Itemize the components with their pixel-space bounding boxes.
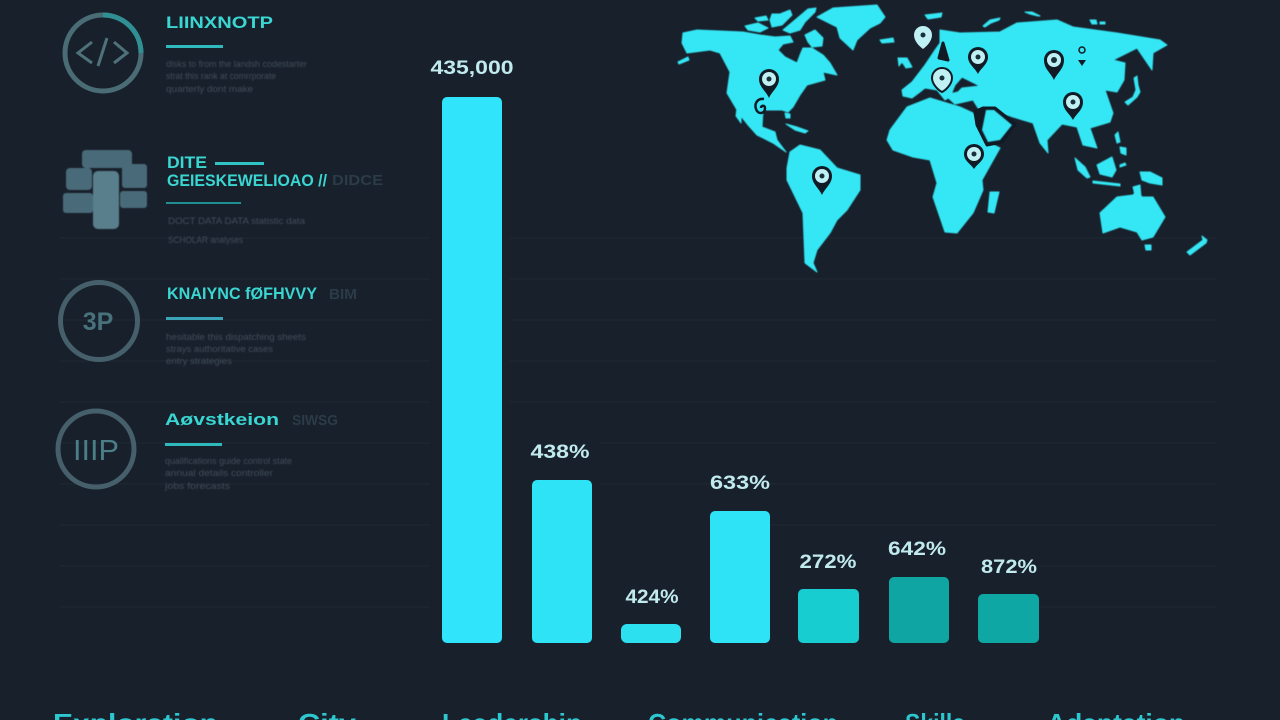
bar 3 bbox=[621, 587, 681, 643]
bar 6: 642% bbox=[888, 539, 946, 560]
bar chart bbox=[430, 58, 1039, 643]
icon: knot circle bbox=[60, 282, 138, 360]
bar 1: 435,000 bbox=[430, 58, 514, 79]
icon: monogram circle bbox=[58, 411, 134, 487]
map pin: spiral mexico bbox=[755, 99, 765, 113]
text block: item 2 bbox=[168, 216, 305, 245]
text block: item 1: quarterly dont make bbox=[166, 84, 253, 94]
item: data skill bbox=[63, 150, 383, 245]
heading: item 4: Aøvstkeion bbox=[165, 410, 279, 429]
icon: monogram circle: IIIP bbox=[73, 435, 119, 467]
text block: item 4 bbox=[164, 456, 292, 491]
item: strategy skill bbox=[60, 282, 357, 366]
map landmasses bbox=[678, 5, 1207, 272]
world map bbox=[678, 5, 1207, 272]
text block: item 4: qualifications guide control state bbox=[165, 456, 292, 466]
text block: item 4: annual details controller bbox=[165, 468, 273, 478]
map pin: scandinavia bbox=[914, 26, 932, 49]
icon: stacked blocks bbox=[63, 150, 147, 229]
text block: item 1 bbox=[166, 59, 307, 94]
text block: item 2: SCHOLAR analyses bbox=[168, 235, 243, 245]
text block: item 4: jobs forecasts bbox=[164, 481, 231, 491]
bar 2: 438% bbox=[530, 442, 590, 463]
text block: item 3: entry strategies bbox=[166, 356, 233, 366]
bottom category labels bbox=[53, 708, 1185, 720]
map: arabia bbox=[982, 110, 1012, 142]
panel: skills list bbox=[58, 13, 383, 491]
map pin: china bbox=[1063, 92, 1083, 120]
text block: item 2: DOCT DATA DATA statistic data bbox=[168, 216, 305, 226]
bar 6 bbox=[888, 539, 949, 643]
text block: item 1: dlsks to from the landsh codestarter bbox=[166, 59, 307, 69]
bar 4: 633% bbox=[710, 473, 770, 494]
item: code skill bbox=[65, 13, 307, 94]
map pin: east africa bbox=[964, 144, 984, 169]
map pin: russia east bbox=[1044, 50, 1064, 80]
bar 5: 272% bbox=[800, 552, 857, 573]
heading: item 1: LIINXNOTP bbox=[166, 13, 273, 32]
bar 7 bbox=[978, 557, 1039, 643]
bar 4 bbox=[710, 473, 770, 643]
map pin: siberia small bbox=[1078, 47, 1086, 66]
text block: item 3: strays authoritative cases bbox=[166, 344, 274, 354]
map pin: north america bbox=[759, 69, 779, 98]
heading: item 3: KNAIYNC fØFHVVY bbox=[167, 284, 318, 303]
heading: item 2 line 2: GEIESKEWELIOAO // bbox=[167, 171, 327, 190]
heading: item 2 line 1: DITE bbox=[167, 153, 207, 172]
ghost label: item 3: BIM bbox=[329, 286, 357, 303]
map pin: southern europe bbox=[932, 68, 952, 92]
icon: knot circle: 3P bbox=[83, 308, 113, 336]
item: acquisition skill bbox=[58, 410, 338, 491]
bar 2 bbox=[530, 442, 592, 643]
text block: item 1: strat this rank at comrrporate bbox=[166, 71, 276, 81]
bar 7: 872% bbox=[981, 557, 1037, 578]
text block: item 3: hesitable this dispatching sheets bbox=[166, 332, 307, 342]
map pin: russia west bbox=[968, 47, 988, 74]
map dark gaps bbox=[939, 43, 1015, 145]
bar 1 bbox=[430, 58, 514, 643]
ghost label: item 4: SIWSG bbox=[292, 412, 338, 429]
map pin: south america bbox=[812, 166, 832, 195]
ghost label: item 2: DIDCE bbox=[332, 172, 383, 189]
bar 3: 424% bbox=[626, 587, 679, 608]
text block: item 3 bbox=[166, 332, 307, 366]
bar 5 bbox=[798, 552, 859, 643]
icon: code brackets circle bbox=[65, 15, 141, 91]
